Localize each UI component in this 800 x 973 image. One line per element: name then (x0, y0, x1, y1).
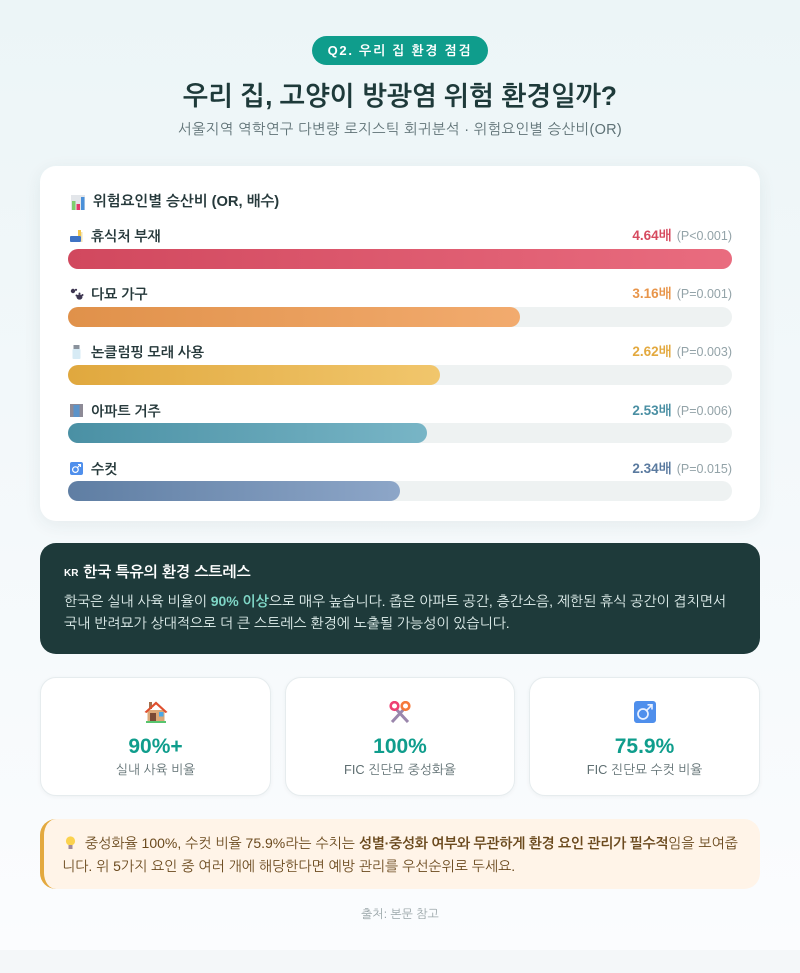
icon: bath (70, 230, 82, 242)
icon: scissors (389, 701, 411, 723)
stat value: 75.9% (615, 735, 674, 758)
label: 휴식처 부재: 휴식처 부재 (91, 228, 161, 244)
stat label: 실내 사육 비율 (116, 762, 195, 777)
icon: paw (70, 288, 84, 300)
source note: 출처: 본문 참고 (361, 907, 439, 921)
bar: 3.16 (68, 307, 732, 327)
label: 논클럼핑 모래 사용: 논클럼핑 모래 사용 (91, 344, 204, 360)
value: 2.53배: 2.53배 (P=0.006) (632, 403, 732, 418)
bar: 2.34 (68, 481, 732, 501)
chart heading: 위험요인별 승산비 (OR, 배수) (93, 194, 279, 210)
callout text (62, 835, 738, 874)
icon: male sign (634, 701, 656, 723)
label: 다묘 가구: 다묘 가구 (91, 286, 148, 302)
label: 수컷: 수컷 (91, 461, 117, 477)
panel: odds ratio bar chart (40, 166, 760, 521)
bar: 2.62 (68, 365, 732, 385)
bar: 4.64 (68, 249, 732, 269)
icon: house (144, 702, 168, 723)
icon: KR flag letters: KR (64, 568, 78, 579)
stat card: neuter (285, 677, 515, 796)
icon: salt shaker (72, 345, 80, 359)
subtitle: 서울지역 역학연구 다변량 로지스틱 회귀분석 · 위험요인별 승산비(OR) (178, 122, 622, 138)
title: 우리 집, 고양이 방광염 위험 환경일까? (183, 81, 617, 111)
panel body text: 국내 반려묘가 상대적으로 더 큰 스트레스 환경에 노출될 가능성이 있습니다. (64, 615, 510, 631)
stat label: FIC 진단묘 중성화율 (344, 762, 456, 777)
icon: bar chart (71, 195, 85, 210)
icon: male sign (70, 462, 83, 475)
stat value: 100% (373, 735, 427, 758)
stat card: male (529, 677, 760, 796)
value: 2.62배: 2.62배 (P=0.003) (632, 344, 732, 359)
value: 3.16배: 3.16배 (P=0.001) (632, 286, 732, 301)
badge: Q2: Q2. 우리 집 환경 점검 (328, 43, 472, 58)
panel: Korea environment stress (40, 543, 760, 654)
callout text: 니다. 위 5가지 요인 중 여러 개에 해당한다면 예방 관리를 우선순위로 두세요. (62, 858, 515, 874)
stat card: indoor (40, 677, 271, 796)
icon: light bulb (66, 836, 76, 849)
bar: 2.53 (68, 423, 732, 443)
icon: apartment (70, 404, 83, 417)
stat value: 90%+ (128, 735, 183, 758)
callout: key insight (40, 819, 760, 889)
label: 아파트 거주: 아파트 거주 (91, 403, 161, 419)
stat label: FIC 진단묘 수컷 비율 (587, 762, 702, 777)
panel body text: 한국은 실내 사육 비율이 90% 이상으로 매우 높습니다. 좁은 아파트 공간, 층간소음, 제한된 휴식 공간이 겹치면서 (64, 593, 726, 609)
panel heading: 한국 특유의 환경 스트레스 (83, 564, 251, 581)
value: 4.64배: 4.64배 (P<0.001) (632, 228, 732, 243)
value: 2.34배: 2.34배 (P=0.015) (632, 461, 732, 476)
panel body text (64, 593, 726, 631)
badge: Q2 (312, 36, 488, 65)
callout text: 중성화율 100%, 수컷 비율 75.9%라는 수치는 성별·중성화 여부와 무관하게 환경 요인 관리가 필수적임을 보여줍 (85, 835, 738, 851)
